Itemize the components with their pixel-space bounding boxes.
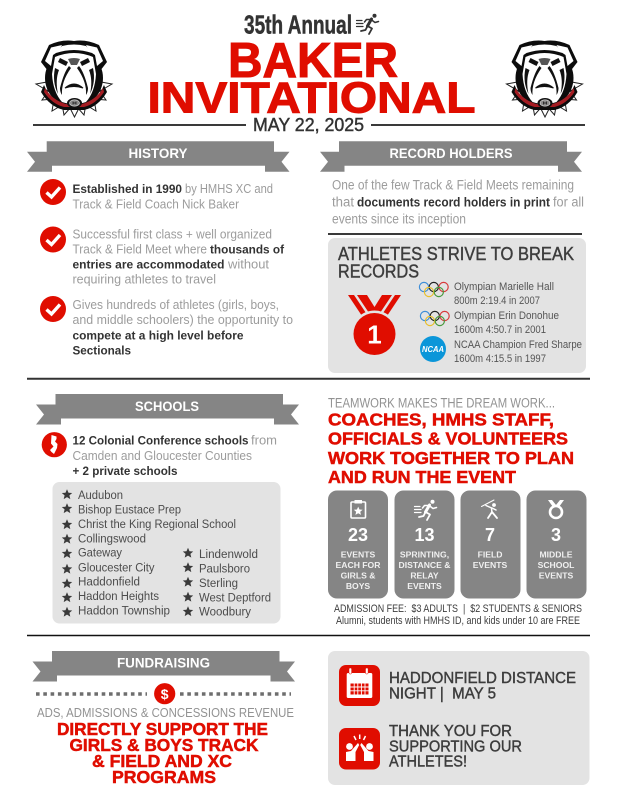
text: opportunity: Gives hundreds of athletes (girls, boys, [72, 298, 279, 312]
card: 3 middle school: EVENTS [539, 570, 573, 580]
text: established [72, 182, 273, 212]
panel: school list: Collingswood [78, 532, 146, 546]
text: Erin Donohue: Olympian Erin Donohue [454, 310, 559, 322]
panel: school list: Audubon [78, 488, 123, 502]
text: documents record holders: that [332, 194, 354, 210]
card: 13 sprinting: EVENTS [407, 581, 442, 591]
panel: school list: Christ the King Regional School [78, 517, 236, 531]
panel: record holders [320, 141, 586, 373]
icon: NCAA: NCAA [422, 345, 444, 354]
heading: support programs: DIRECTLY SUPPORT THE [57, 719, 268, 739]
panel: school list: Haddon Township [78, 604, 170, 618]
panel: school list: Lindenwold [199, 547, 258, 561]
card: 3 middle school: SCHOOL [538, 560, 574, 570]
panel: school list: West Deptford [199, 590, 271, 604]
heading: support programs [57, 719, 268, 787]
card: 3 middle school [526, 490, 586, 598]
card: 13 sprinting: RELAY [410, 570, 439, 580]
text: thank you: ATHLETES! [389, 754, 467, 770]
panel: teamwork [328, 396, 586, 627]
card: 23 events: 23 [348, 525, 368, 545]
text: Marielle Hall: 800m 2:19.4 in 2007 [454, 295, 540, 307]
text: established: by HMHS XC and [185, 182, 273, 196]
icon: javelin [482, 500, 497, 518]
icon: bulldog mascot left [36, 40, 112, 117]
text: Fred Sharpe [454, 339, 582, 365]
heading: coaches and staff: AND RUN THE EVENT [328, 467, 517, 487]
icon: check 2 [40, 226, 66, 252]
text: Fred Sharpe: 1600m 4:15.5 in 1997 [454, 353, 546, 365]
text: teamwork kicker: TEAMWORK MAKES THE DREAM WORK... [328, 396, 555, 410]
text: schools summary [72, 434, 277, 478]
panel: athletes strive card [328, 238, 586, 373]
heading: coaches and staff [328, 410, 574, 487]
card: 7 field: FIELD [478, 550, 502, 560]
icon: bulldog mascot right [506, 40, 582, 117]
text: thank you [389, 723, 522, 770]
icon: olympic rings 1 [419, 282, 448, 297]
text: first class meet [72, 228, 285, 286]
text: first class meet: Track & Field Meet where [72, 242, 207, 256]
icon: medal [348, 295, 401, 358]
heading: athletes strive: ATHLETES STRIVE TO BREAK [338, 244, 574, 264]
icon: clipboard [351, 500, 366, 518]
panel: school list: Bishop Eustace Prep [78, 502, 181, 516]
icon: olympic rings 2 [420, 311, 449, 326]
text: documents record holders: documents record holders in print [357, 194, 551, 210]
title: Invitational: INVITATIONAL [148, 74, 476, 122]
text: Erin Donohue [454, 310, 559, 336]
heading: history banner: HISTORY [128, 145, 188, 161]
text: established: Track & Field Coach Nick Baker [72, 198, 239, 212]
text: distance night: HADDONFIELD DISTANCE [389, 670, 576, 687]
card: 7 field: 7 [485, 525, 495, 545]
heading: athletes strive [338, 244, 574, 282]
heading: schools banner [36, 394, 299, 424]
text: Marielle Hall [454, 281, 554, 307]
text: opportunity: compete at a high level before [72, 328, 244, 342]
text: documents record holders [332, 178, 584, 226]
card: 13 sprinting [394, 490, 454, 598]
icon: dollar divider: $ [161, 686, 169, 702]
heading: fundraising banner: FUNDRAISING [117, 654, 210, 670]
card: 23 events: BOYS [346, 581, 370, 591]
heading: schools banner: SCHOOLS [135, 398, 199, 414]
icon: check 3 [40, 296, 66, 322]
icon: high five [339, 728, 380, 770]
text: first class meet: Successful first class + well organized [72, 228, 272, 242]
text: documents record holders: events since its inception [332, 212, 466, 226]
text: admission fee: Alumni, students with HMHS ID, and kids under 10 are FREE [336, 615, 580, 627]
card: 7 field: EVENTS [473, 560, 507, 570]
text: schools summary: 12 Colonial Conference schools [72, 434, 249, 448]
text: distance night [389, 670, 576, 702]
text: opportunity: and middle schoolers) the opportunity to [72, 313, 293, 327]
panel: school list: Haddonfield [78, 574, 140, 588]
panel: distance night and thanks [328, 651, 590, 785]
text: first class meet: thousands of [210, 242, 285, 256]
panel: fundraising [32, 651, 295, 787]
card: 13 sprinting: SPRINTING, [400, 550, 449, 560]
card: 3 middle school: MIDDLE [540, 550, 573, 560]
icon: calendar [339, 665, 380, 706]
text: thank you: THANK YOU FOR [389, 723, 512, 740]
icon: NCAA [420, 336, 446, 362]
icon: runner [356, 14, 378, 34]
date with rule: MAY 22, 2025 [253, 115, 364, 135]
card: 23 events: GIRLS & [341, 570, 375, 580]
text: admission fee [334, 603, 582, 627]
icon: check 1 [40, 179, 66, 205]
heading: athletes strive: RECORDS [338, 262, 419, 282]
text: opportunity [72, 298, 293, 358]
heading: coaches and staff: OFFICIALS & VOLUNTEERS [328, 429, 568, 449]
panel: school list [52, 482, 280, 624]
card: 23 events [328, 490, 388, 598]
text: Marielle Hall: Olympian Marielle Hall [454, 281, 554, 293]
text: documents record holders: One of the few Track & Field Meets remaining [332, 178, 574, 192]
heading: coaches and staff: COACHES, HMHS STAFF, [328, 410, 554, 430]
icon: medal: 1 [367, 320, 382, 350]
heading: record holders banner [320, 141, 582, 172]
card: 23 events: EACH FOR [336, 560, 381, 570]
text: thank you: SUPPORTING OUR [389, 738, 522, 756]
card: 23 events: EVENTS [341, 550, 375, 560]
panel: history [27, 141, 293, 358]
panel: schools [36, 394, 299, 624]
card: 13 sprinting: DISTANCE & [399, 560, 450, 570]
text: documents record holders: for all [553, 194, 584, 210]
heading: fundraising banner [32, 651, 295, 682]
card: 7 field [460, 490, 520, 598]
icon: medal [548, 500, 564, 518]
text: schools summary: + 2 private schools [72, 464, 178, 478]
text: established: Established in 1990 [72, 182, 182, 196]
text: first class meet: entries are accommodated [72, 258, 224, 272]
text: schools summary: Camden and Gloucester Counties [72, 449, 252, 463]
panel: school list: Haddon Heights [78, 589, 159, 603]
panel: school list: Sterling [199, 576, 238, 590]
card: 13 sprinting: 13 [414, 525, 435, 545]
heading: support programs: & FIELD AND XC [92, 751, 232, 771]
heading: support programs: PROGRAMS [112, 767, 216, 787]
heading: record holders banner: RECORD HOLDERS [390, 145, 512, 161]
icon: runner [414, 500, 436, 520]
text: Erin Donohue: 1600m 4:50.7 in 2001 [454, 324, 546, 336]
panel: school list: Woodbury [199, 604, 252, 618]
icon: New Jersey [42, 432, 67, 457]
heading: support programs: GIRLS & BOYS TRACK [70, 735, 259, 755]
text: opportunity: Sectionals [72, 344, 131, 358]
panel: school list: Paulsboro [199, 562, 250, 576]
text: revenue: ADS, ADMISSIONS & CONCESSIONS REVENUE [37, 706, 294, 720]
panel: school list: Gateway [78, 546, 123, 560]
panel: school list: Gloucester City [78, 560, 155, 574]
title: Baker: BAKER [228, 33, 398, 88]
text: first class meet: without [227, 258, 270, 272]
title: 35th Annual: 35th Annual [244, 10, 352, 40]
heading: history banner [27, 141, 290, 172]
text: schools summary: from [251, 434, 277, 448]
heading: coaches and staff: WORK TOGETHER TO PLAN [328, 448, 574, 468]
icon: dollar divider [36, 683, 291, 704]
text: first class meet: requiring athletes to travel [72, 272, 216, 286]
text: Fred Sharpe: NCAA Champion Fred Sharpe [454, 339, 582, 351]
card: 3 middle school: 3 [551, 525, 561, 545]
text: distance night: NIGHT | MAY 5 [389, 686, 496, 702]
